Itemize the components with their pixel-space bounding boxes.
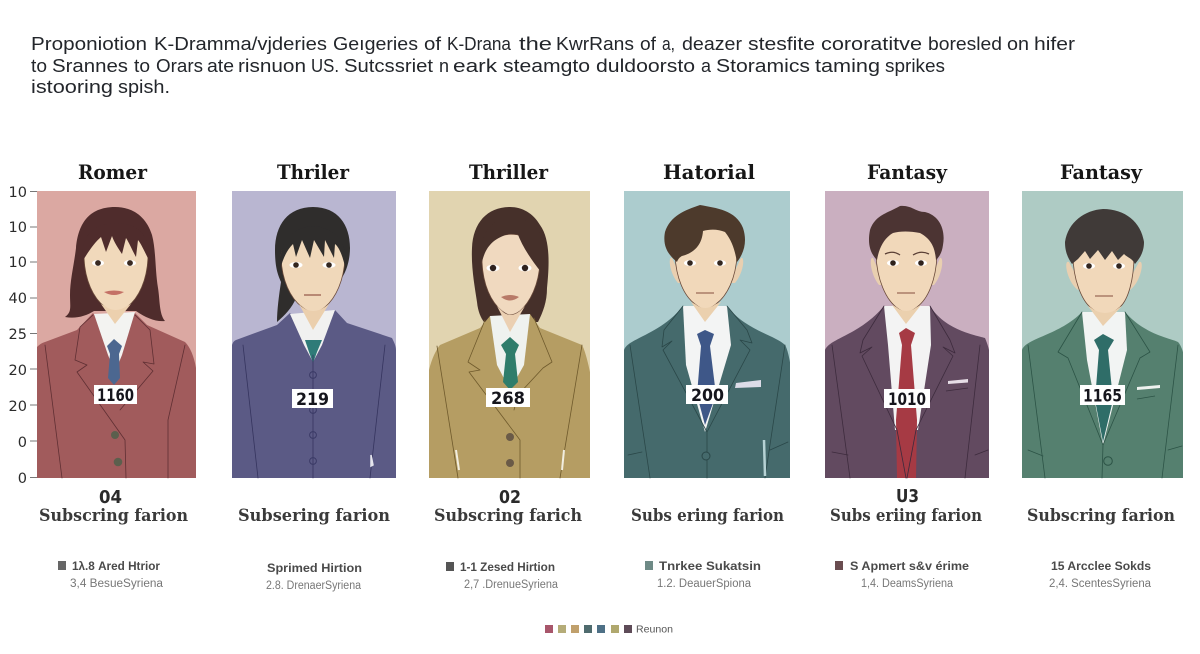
detail text: S Apmert s&v érime xyxy=(850,561,969,573)
y axis: 10 xyxy=(9,220,27,236)
y axis: 20 xyxy=(9,363,27,379)
title paragraph: to xyxy=(31,56,47,76)
detail text xyxy=(58,561,164,590)
count: 04 xyxy=(99,488,122,508)
count: U3 xyxy=(896,487,919,507)
title paragraph: n xyxy=(439,56,449,76)
portrait background xyxy=(624,191,790,478)
title paragraph: a xyxy=(701,56,712,76)
detail text: 2,4. ScentesSyriena xyxy=(1049,578,1152,590)
y axis: 25 xyxy=(9,327,27,343)
detail text: 1λ.8 Ared Htrior xyxy=(72,561,161,573)
detail text: 3,4 BesueSyriena xyxy=(70,578,164,590)
portrait background xyxy=(37,191,196,478)
title paragraph: Geıgeries xyxy=(333,34,418,54)
portrait: man in teal suit xyxy=(624,205,790,478)
title paragraph: spish. xyxy=(118,77,170,97)
portrait background xyxy=(1022,191,1183,478)
caption: Subscring farion xyxy=(1027,506,1175,525)
portrait background xyxy=(429,191,590,478)
portrait background xyxy=(825,191,989,478)
value badge: 1160 xyxy=(97,386,134,406)
value badge: 219 xyxy=(296,390,329,410)
detail text: 1-1 Zesed Hirtion xyxy=(460,562,555,574)
heading: Hatorial: Hatorial xyxy=(663,160,755,184)
detail text: Tnrkee Sukatsin xyxy=(659,561,761,573)
value badge: 1010 xyxy=(888,390,926,410)
y axis: 10 xyxy=(9,185,27,201)
portrait: woman in indigo blazer xyxy=(232,207,396,478)
title paragraph: K-Drana xyxy=(447,34,512,54)
title paragraph: Orars xyxy=(156,56,203,76)
title paragraph: of xyxy=(640,34,657,54)
title paragraph: stesfite xyxy=(748,34,815,54)
detail text xyxy=(835,561,969,590)
title paragraph: Sutcssriet xyxy=(344,56,433,76)
y axis: 0 xyxy=(18,471,27,487)
panel: Hatorial xyxy=(624,160,790,590)
title paragraph: sprikes xyxy=(885,56,945,76)
caption: Subscring farion xyxy=(39,506,188,525)
portrait: woman in tan blazer xyxy=(429,207,590,478)
panel: Fantasy (plum) xyxy=(825,160,989,590)
heading: Romer: Romer xyxy=(78,160,147,184)
heading: Fantasy: Fantasy xyxy=(1060,160,1143,184)
heading: Fantasy: Fantasy xyxy=(867,160,948,184)
portrait: woman in red blazer xyxy=(37,207,196,478)
title paragraph: K-Dramma/vjderies xyxy=(154,34,327,54)
panel: Romer xyxy=(37,160,196,590)
title paragraph: hifer xyxy=(1034,34,1075,54)
legend xyxy=(545,624,673,636)
y axis: 20 xyxy=(9,399,27,415)
title paragraph: the xyxy=(519,34,552,54)
detail text: 2,7 .DrenueSyriena xyxy=(464,579,559,591)
count: 02 xyxy=(499,488,521,508)
detail text: 1.2. DeauerSpiona xyxy=(657,578,752,590)
title paragraph: to xyxy=(134,56,150,76)
portrait: man in green suit xyxy=(1022,209,1183,478)
portrait background xyxy=(232,191,396,478)
detail text: Sprimed Hirtion xyxy=(267,563,362,575)
y axis: 10 xyxy=(9,255,27,271)
panel: Fantasy (green) xyxy=(1022,160,1183,590)
title paragraph: istooring xyxy=(31,77,113,97)
title paragraph: cororatitve xyxy=(821,34,922,54)
title paragraph: boresled xyxy=(928,34,1002,54)
title paragraph: taming xyxy=(815,56,880,76)
title paragraph: Srannes xyxy=(52,56,128,76)
title paragraph: of xyxy=(424,34,442,54)
title paragraph: Storamics xyxy=(716,56,810,76)
title paragraph: ate xyxy=(207,56,234,76)
portrait: man in plum suit xyxy=(825,206,989,478)
value badge: 200 xyxy=(691,386,724,406)
title paragraph: on xyxy=(1007,34,1029,54)
caption: Subscring farich xyxy=(434,506,582,525)
title paragraph: Proponiotion xyxy=(31,34,147,54)
panel: Thriller xyxy=(429,160,590,591)
y axis: 0 xyxy=(18,435,27,451)
title paragraph: duldoorsto xyxy=(596,56,695,76)
heading: Thriller: Thriller xyxy=(469,160,548,184)
panel: Thriler xyxy=(232,160,396,592)
title paragraph: deazer xyxy=(682,34,742,54)
title paragraph: steamgto xyxy=(503,56,590,76)
detail text: 15 Arcclee Sokds xyxy=(1051,561,1151,573)
detail text xyxy=(645,561,761,590)
detail text xyxy=(1049,561,1152,590)
title paragraph: eark xyxy=(453,56,498,76)
title paragraph: a, xyxy=(662,34,675,54)
detail text: 2.8. DrenaerSyriena xyxy=(266,580,362,592)
detail text xyxy=(446,562,559,591)
caption: Subs eriıng farion xyxy=(631,506,784,525)
detail text: 1,4. DeamsSyriena xyxy=(861,578,954,590)
title paragraph: risnuon xyxy=(238,56,306,76)
y axis: 40 xyxy=(9,291,27,307)
title paragraph: KwrRans xyxy=(556,34,634,54)
title paragraph xyxy=(31,34,1075,97)
legend: Reunon xyxy=(636,624,673,636)
value badge: 1165 xyxy=(1083,386,1122,406)
y axis xyxy=(9,185,37,487)
caption: Subs eriing farion xyxy=(830,506,982,525)
heading: Thriler: Thriler xyxy=(277,160,349,184)
title paragraph: US. xyxy=(311,56,339,76)
detail text xyxy=(266,563,362,592)
value badge: 268 xyxy=(491,389,525,409)
caption: Subsering farion xyxy=(238,506,390,525)
